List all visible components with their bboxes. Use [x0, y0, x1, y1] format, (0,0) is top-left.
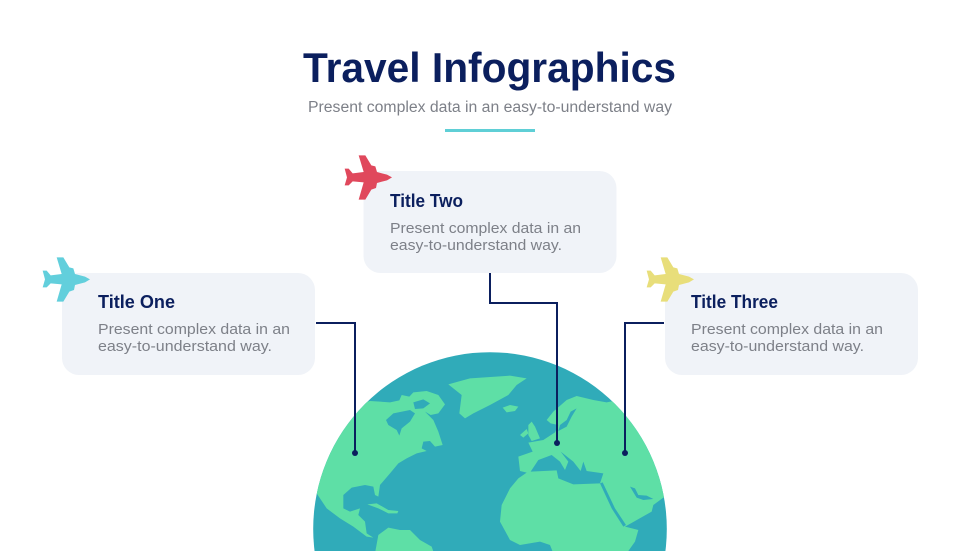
south america	[375, 528, 434, 551]
heading: title one: Title One	[98, 292, 175, 312]
connector: title two	[490, 273, 560, 446]
text: title two: easy-to-understand way.	[390, 238, 562, 254]
eurasia and africa	[500, 396, 677, 551]
heading: title two: Title Two	[390, 191, 463, 211]
persian gulf	[630, 487, 653, 500]
title: Travel Infographics	[303, 44, 676, 91]
north america	[303, 391, 445, 538]
baltic sea	[558, 408, 577, 431]
red sea	[600, 482, 626, 527]
text: title two	[390, 221, 581, 254]
text: title three: easy-to-understand way.	[691, 339, 864, 355]
text: title two: Present complex data in an	[390, 221, 581, 237]
connector: title one	[316, 323, 358, 456]
cuba	[367, 503, 398, 513]
globe	[303, 350, 677, 551]
britain	[528, 422, 540, 441]
text: title one: easy-to-understand way.	[98, 339, 272, 355]
mediterranean sea	[531, 452, 603, 484]
text: title one: Present complex data in an	[98, 322, 290, 338]
ireland	[520, 429, 528, 438]
greenland	[448, 376, 527, 418]
icon: teal plane	[43, 257, 90, 302]
text: title three: Present complex data in an	[691, 322, 883, 338]
panel: title three	[665, 273, 918, 375]
connector: title three	[622, 323, 664, 456]
icon: yellow plane	[647, 257, 694, 302]
icon: red plane	[345, 155, 392, 200]
text: title three	[691, 322, 883, 355]
iceland	[503, 405, 518, 412]
subtitle: Present complex data in an easy-to-understand way	[308, 99, 672, 116]
heading: title three: Title Three	[691, 292, 778, 312]
continents	[303, 376, 677, 551]
title underline	[445, 129, 535, 132]
panel: title one	[62, 273, 315, 375]
text: title one	[98, 322, 290, 355]
panel: title two	[364, 171, 616, 273]
